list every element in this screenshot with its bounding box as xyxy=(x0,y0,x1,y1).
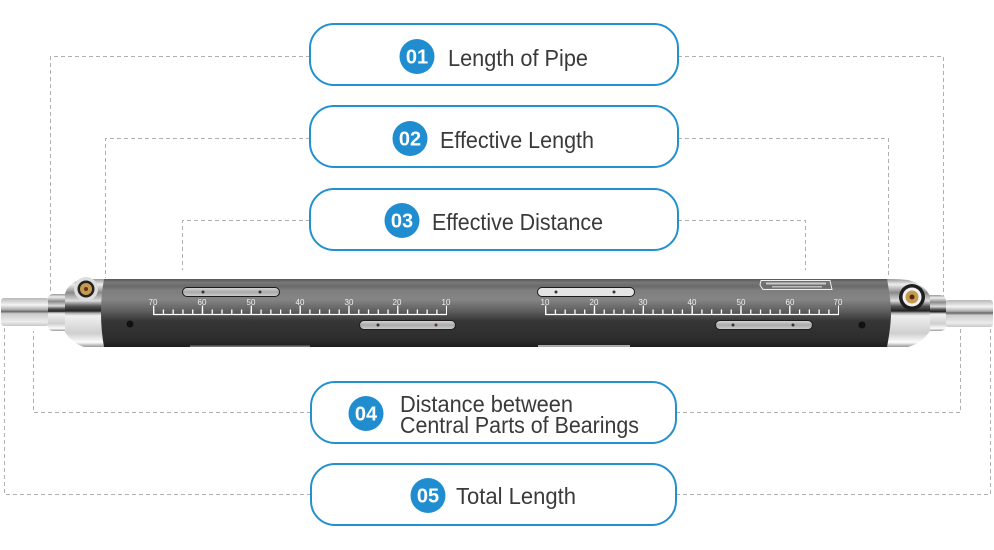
right ruler scale: 60 xyxy=(786,298,795,307)
label: total length: Total Length xyxy=(456,483,576,509)
left ruler scale: 40 xyxy=(296,298,305,307)
callout 01: length of pipe xyxy=(310,24,678,85)
callout 02: effective length xyxy=(310,106,678,167)
air shaft illustration xyxy=(1,277,993,347)
badge 05: 05 xyxy=(417,486,439,508)
right collar xyxy=(929,295,946,331)
pipe bottom highlights xyxy=(190,345,630,347)
right ruler scale: 30 xyxy=(639,298,648,307)
badge 02: 02 xyxy=(399,128,421,150)
callout 05: total length xyxy=(311,464,676,525)
badge 02 xyxy=(392,121,428,156)
leader line: distance between central parts of bearings xyxy=(34,329,960,412)
left ruler scale xyxy=(149,298,451,314)
badge 01: 01 xyxy=(406,46,428,68)
badge 01 xyxy=(400,39,434,74)
callout 04: distance between central parts of bearings xyxy=(311,382,676,443)
label: effective length: Effective Length xyxy=(440,127,594,153)
right ruler scale: 70 xyxy=(834,298,843,307)
badge 04 xyxy=(348,396,384,431)
right ruler scale: 40 xyxy=(688,298,697,307)
air slots xyxy=(182,288,812,330)
label: length of pipe: Length of Pipe xyxy=(448,45,588,71)
leader line: effective length xyxy=(106,138,888,278)
label: distance between central parts of bearings: Central Parts of Bearings xyxy=(400,412,639,438)
callout 03: effective distance xyxy=(310,189,678,250)
badge 03: 03 xyxy=(391,210,413,232)
label: effective distance: Effective Distance xyxy=(432,209,603,235)
badge 04: 04 xyxy=(355,404,378,426)
left ruler scale: 10 xyxy=(442,298,451,307)
right shaft end xyxy=(945,300,993,327)
left ruler scale: 30 xyxy=(345,298,354,307)
left shaft end xyxy=(1,298,49,326)
right ruler scale: 10 xyxy=(541,298,550,307)
right grease nipple xyxy=(899,284,925,310)
left ruler scale: 50 xyxy=(247,298,256,307)
left ruler scale: 60 xyxy=(198,298,207,307)
maker's plate xyxy=(760,280,832,290)
leader line: total length xyxy=(4,326,990,494)
right chrome end cap xyxy=(886,279,930,347)
right ruler scale xyxy=(541,298,843,314)
left collar xyxy=(48,294,66,331)
right ruler scale: 20 xyxy=(590,298,599,307)
left chrome end cap xyxy=(65,279,104,347)
label: distance between central parts of bearings: Distance between xyxy=(400,391,573,417)
left ruler scale: 70 xyxy=(149,298,158,307)
leader line: effective distance xyxy=(182,220,806,270)
right ruler scale: 50 xyxy=(737,298,746,307)
mounting holes xyxy=(126,320,866,328)
badge 03 xyxy=(384,203,420,238)
badge 05 xyxy=(410,478,446,513)
left ruler scale: 20 xyxy=(393,298,402,307)
left grease nipple xyxy=(74,277,98,301)
black pipe body xyxy=(101,279,891,347)
leader line: length of pipe xyxy=(50,56,944,296)
label: distance between central parts of bearings xyxy=(400,391,639,438)
